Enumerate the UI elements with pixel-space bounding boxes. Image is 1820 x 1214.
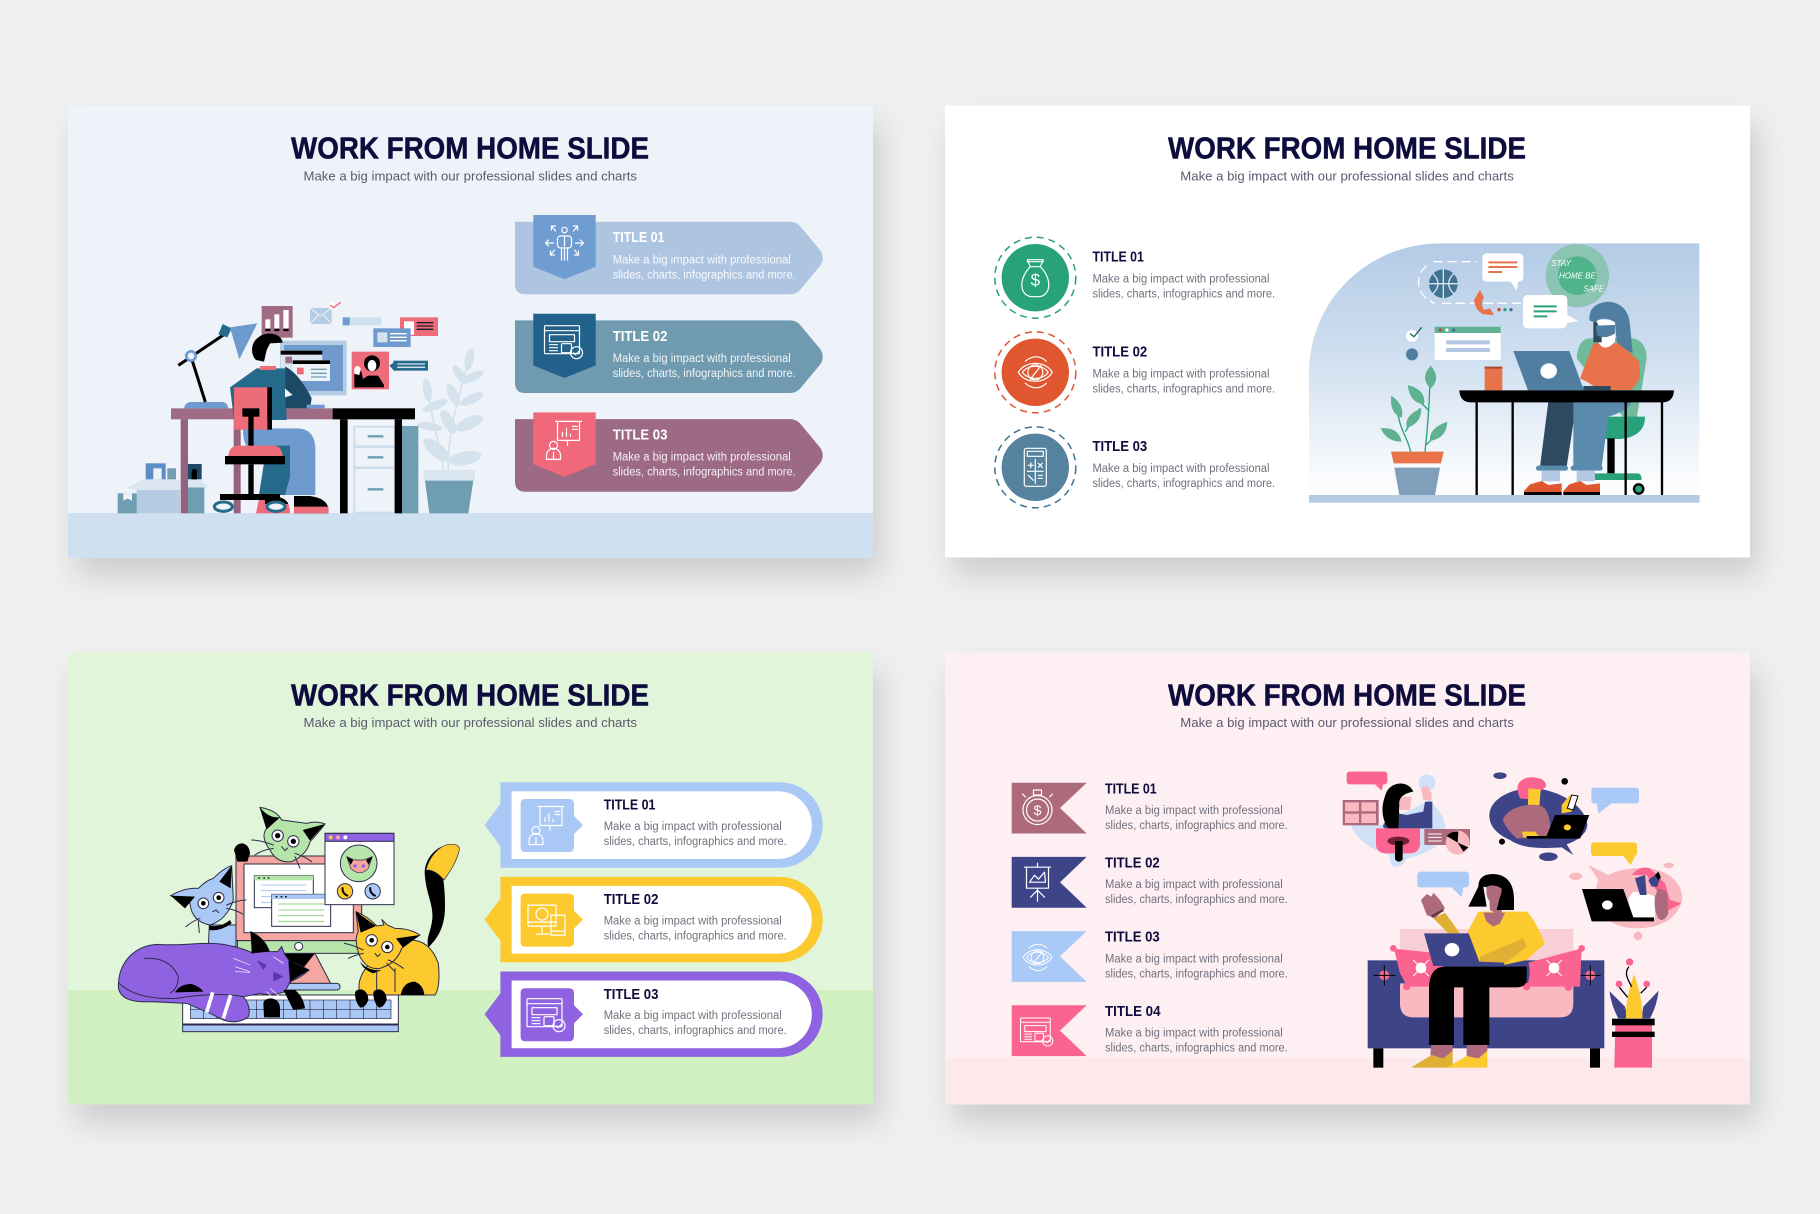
monitor with windows — [280, 341, 347, 395]
icon: money bag: $ — [1031, 271, 1041, 290]
plant — [417, 347, 485, 513]
slide: pink work from home — [945, 652, 1750, 1104]
icon: basketball — [1429, 269, 1458, 298]
illustration: woman with mask at laptop — [1309, 243, 1700, 503]
card: title 01: slides, charts, infographics and more. — [604, 836, 787, 848]
monitor — [236, 856, 362, 990]
list item: title 01: Make a big impact with professional — [1105, 805, 1283, 817]
laptop — [1513, 351, 1611, 390]
card: title 02: Make a big impact with professional — [604, 916, 782, 928]
title: WORK FROM HOME SLIDE — [1168, 130, 1526, 166]
card: title 03: slides, charts, infographics and more. — [613, 467, 796, 479]
browser window — [1435, 327, 1501, 360]
stay home badge — [1546, 244, 1609, 307]
card: title 01: slides, charts, infographics and more. — [613, 269, 796, 281]
yellow cat tail — [425, 844, 459, 947]
dashed lines — [1419, 262, 1522, 303]
subtitle: Make a big impact with our professional slides and charts — [1180, 168, 1514, 183]
title: WORK FROM HOME SLIDE — [291, 678, 649, 712]
list item: title 03: TITLE 03 — [1105, 930, 1160, 946]
woman — [1524, 302, 1640, 495]
sofa back — [1368, 929, 1604, 1068]
progress bar — [343, 317, 382, 325]
card: title 02: TITLE 02 — [604, 892, 658, 908]
bar chart tile — [262, 306, 293, 338]
card: title 03: Make a big impact with professional — [613, 452, 791, 464]
illustration: cats and computer — [118, 807, 459, 1032]
card: title 02: slides, charts, infographics and more. — [604, 931, 787, 943]
icon: money bag — [1022, 260, 1049, 297]
list item: title 02: TITLE 02 — [1105, 855, 1160, 871]
list item: title 03 — [995, 427, 1275, 508]
cushions — [1390, 945, 1585, 991]
icon: browser window — [527, 999, 565, 1032]
slide: white work from home — [945, 106, 1750, 558]
card: title 03: TITLE 03 — [613, 428, 667, 444]
list item: title 01: slides, charts, infographics and more. — [1092, 289, 1275, 301]
icon: phone — [1474, 290, 1494, 315]
card: title 01: TITLE 01 — [604, 798, 655, 814]
yellow cat — [344, 912, 439, 1007]
table — [1459, 390, 1674, 495]
card: title 01: Make a big impact with professional — [604, 821, 782, 833]
list item: title 03: Make a big impact with professional — [1092, 463, 1270, 475]
icon: presenter — [529, 806, 564, 844]
stay home badge: SAFE — [1583, 285, 1605, 294]
list item: title 03 — [1012, 930, 1288, 982]
red card — [400, 317, 438, 336]
card: title 01 — [515, 215, 823, 294]
card: title 03: TITLE 03 — [604, 987, 658, 1003]
card: title 03 — [515, 412, 823, 492]
subtitle: Make a big impact with our professional slides and charts — [304, 715, 638, 730]
top right scene — [1489, 772, 1639, 861]
green cat — [234, 807, 325, 868]
card: title 01: Make a big impact with professional — [613, 254, 791, 266]
speech bubble green lines — [1523, 295, 1578, 328]
card: title 03: slides, charts, infographics and more. — [604, 1025, 787, 1037]
top left scene — [1343, 772, 1470, 867]
filing cabinet — [354, 426, 418, 513]
list item: title 03: slides, charts, infographics and more. — [1105, 968, 1288, 980]
subtitle: Make a big impact with our professional slides and charts — [1180, 715, 1514, 730]
purple cat — [118, 932, 309, 1022]
list item: title 02 — [995, 332, 1275, 413]
card: title 02: TITLE 02 — [613, 329, 667, 345]
list item: title 04: Make a big impact with professional — [1105, 1028, 1283, 1040]
slide: green work from home — [68, 652, 873, 1104]
list item: title 01: TITLE 01 — [1105, 781, 1157, 797]
list item: title 01: slides, charts, infographics and more. — [1105, 820, 1288, 832]
list item: title 02: slides, charts, infographics and more. — [1092, 383, 1275, 395]
list item: title 04: slides, charts, infographics and more. — [1105, 1043, 1288, 1055]
icon: person with arrows — [546, 226, 584, 260]
icon: browser window — [544, 326, 582, 359]
cup — [1485, 367, 1502, 390]
list item: title 04: TITLE 04 — [1105, 1004, 1160, 1020]
icon: chart board — [1024, 863, 1050, 901]
box — [118, 463, 209, 513]
list item: title 02: Make a big impact with professional — [1092, 368, 1270, 380]
plant — [1381, 366, 1447, 495]
blue card — [373, 328, 411, 347]
video call tile — [352, 352, 428, 389]
man — [230, 334, 328, 513]
icon: eye — [1018, 357, 1052, 388]
potted plant — [1609, 958, 1659, 1068]
list item: title 02 — [1012, 856, 1288, 908]
desk — [171, 408, 415, 513]
subtitle: Make a big impact with our professional slides and charts — [304, 168, 638, 183]
card: title 01 — [485, 782, 823, 868]
list item: title 02: slides, charts, infographics and more. — [1105, 894, 1288, 906]
check and dot — [1406, 327, 1422, 360]
list item: title 03: Make a big impact with professional — [1105, 953, 1283, 965]
card: title 02: Make a big impact with professional — [613, 353, 791, 365]
list item: title 04 — [1012, 1004, 1288, 1056]
icon: browser window — [1020, 1018, 1053, 1046]
list item: title 01 — [1012, 781, 1288, 834]
slide: blue work from home — [68, 106, 873, 558]
card: title 03: Make a big impact with professional — [604, 1010, 782, 1022]
icon: stopwatch — [1022, 790, 1052, 824]
list item: title 01: TITLE 01 — [1092, 250, 1144, 266]
chair — [1577, 338, 1647, 494]
title: WORK FROM HOME SLIDE — [291, 130, 649, 166]
list item: title 01 — [995, 237, 1275, 318]
icon: stopwatch: $ — [1034, 802, 1042, 818]
icon: calculator — [1024, 448, 1046, 486]
speech bubble orange lines — [1482, 253, 1523, 291]
card: title 02 — [515, 314, 823, 393]
envelope — [310, 302, 341, 324]
icon: eye — [1023, 944, 1052, 971]
illustration: women on video call — [1343, 772, 1682, 1068]
card: title 02 — [485, 877, 823, 962]
stay home badge: STAY — [1551, 259, 1572, 268]
card: title 03 — [485, 972, 823, 1057]
illustration: man at desk — [118, 302, 485, 513]
woman — [1411, 872, 1545, 1068]
video call window — [325, 833, 394, 905]
card: title 02: slides, charts, infographics and more. — [613, 368, 796, 380]
card: title 01: TITLE 01 — [613, 230, 664, 246]
list item: title 03: slides, charts, infographics and more. — [1092, 478, 1275, 490]
list item: title 03: TITLE 03 — [1092, 439, 1147, 455]
list item: title 01: Make a big impact with professional — [1092, 274, 1270, 286]
right scene — [1569, 842, 1682, 940]
lamp — [178, 323, 257, 408]
icon: presenter — [546, 421, 582, 459]
office chair — [214, 387, 285, 511]
keyboard — [183, 995, 398, 1032]
title: WORK FROM HOME SLIDE — [1168, 678, 1526, 712]
stay home badge: HOME BE — [1559, 272, 1596, 281]
list item: title 02: Make a big impact with professional — [1105, 879, 1283, 891]
blue cat — [171, 866, 246, 947]
list item: title 02: TITLE 02 — [1092, 344, 1147, 360]
icon: monitor and phone — [528, 905, 565, 935]
dots — [1497, 308, 1513, 311]
